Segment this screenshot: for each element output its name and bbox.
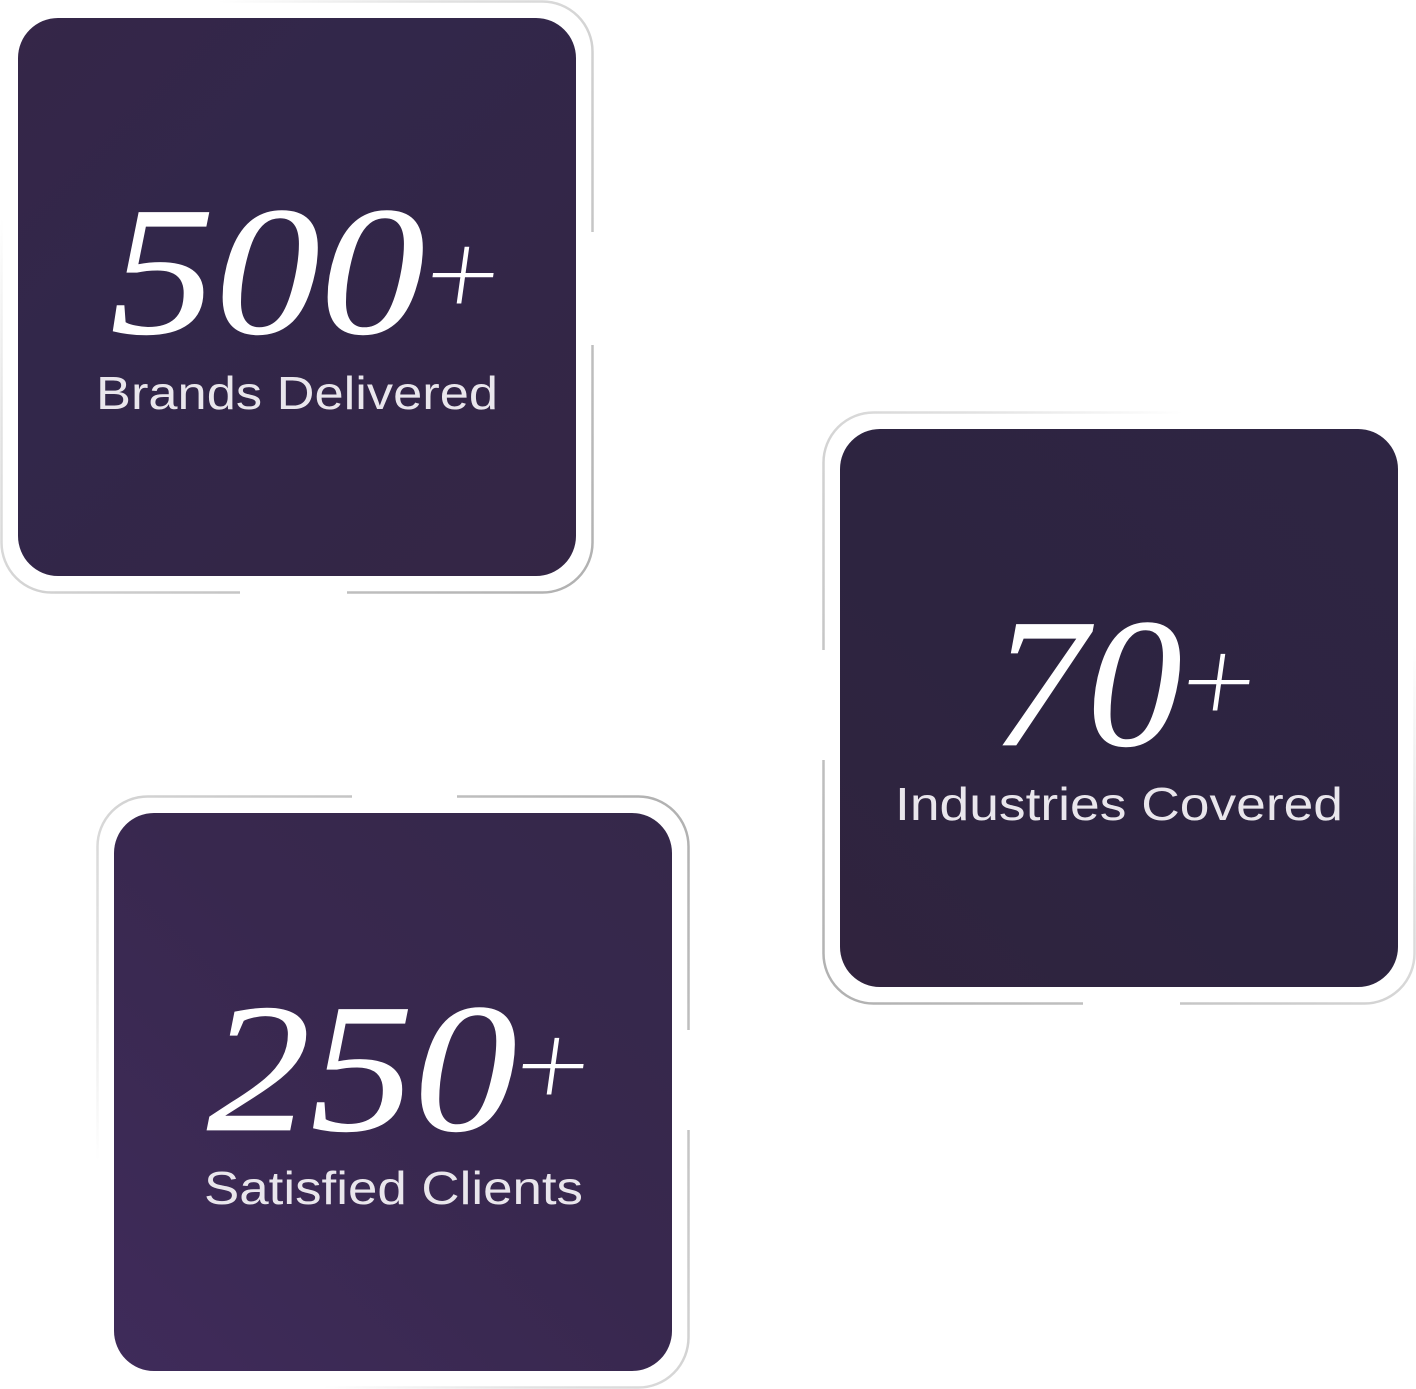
stat number: 500+: 500 bbox=[110, 169, 425, 373]
label: Brands Delivered: Brands Delivered bbox=[96, 367, 498, 419]
stat number: 70+: + bbox=[1171, 613, 1267, 752]
panel: brands delivered card bbox=[2, 2, 596, 596]
stat number: 500+: + bbox=[415, 206, 511, 345]
label: Industries Covered: Industries Covered bbox=[895, 778, 1343, 830]
stat number: 500+ bbox=[110, 169, 511, 373]
stat number: 70+: 70 bbox=[992, 581, 1182, 785]
stat number: 250+: + bbox=[505, 997, 601, 1136]
stat number: 70+ bbox=[992, 581, 1267, 785]
stat number: 250+: 250 bbox=[207, 966, 517, 1170]
label: Satisfied Clients: Satisfied Clients bbox=[204, 1162, 583, 1214]
panel: satisfied clients card bbox=[98, 792, 693, 1388]
panel: industries covered card bbox=[819, 412, 1414, 1007]
